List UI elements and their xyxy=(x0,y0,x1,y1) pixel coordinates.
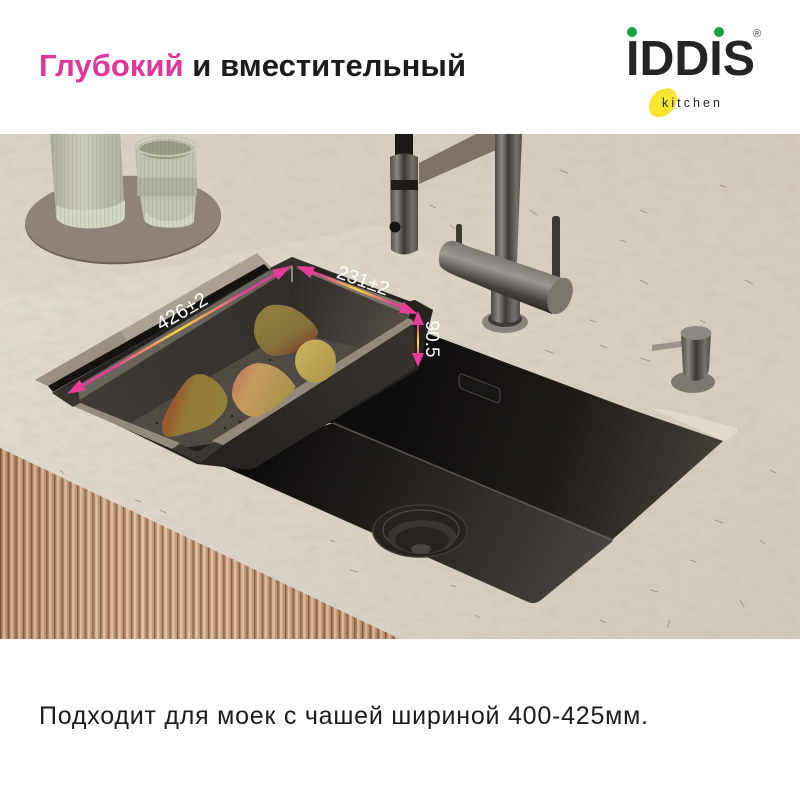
dispenser spout xyxy=(652,340,688,351)
stone countertop and wall xyxy=(0,134,800,639)
faucet pull-out hose xyxy=(395,134,413,156)
pear: middle xyxy=(232,363,295,417)
dispenser base xyxy=(671,371,715,393)
soap dispenser xyxy=(652,326,715,393)
dimension arrow: width 231 xyxy=(296,266,418,314)
fluted wood front panel xyxy=(0,448,400,639)
logo kitchen word: kitchen xyxy=(662,96,720,110)
dimension label: 231±2: 231±2 xyxy=(334,261,392,301)
faucet xyxy=(390,134,578,333)
basin back wall xyxy=(300,328,723,540)
colander centre seam xyxy=(291,266,293,282)
faucet base xyxy=(482,290,528,333)
colander perforated floor xyxy=(75,265,362,449)
dispenser top xyxy=(680,326,712,340)
logo wordmark: IDDIS xyxy=(626,32,755,86)
colander corner: bottom xyxy=(173,442,223,463)
logo registered mark: ® xyxy=(753,28,761,40)
main sink basin xyxy=(213,328,737,603)
drain strainer xyxy=(373,505,467,557)
pear: front left xyxy=(162,374,227,437)
dimension arrow: length 426 xyxy=(67,266,291,394)
title: Глубокий и вместительный xyxy=(39,48,466,83)
colander corner: top xyxy=(270,257,314,270)
pear: back xyxy=(254,305,318,356)
dimension label: 90.5: 90.5 xyxy=(421,321,442,357)
faucet pull-out head xyxy=(390,154,418,254)
faucet spout arm xyxy=(419,134,495,184)
footer note: Подходит для моек с чашей шириной 400-425мм. xyxy=(39,702,648,730)
colander insert xyxy=(52,257,433,470)
colander corner: left xyxy=(52,382,80,407)
bottle xyxy=(50,134,125,228)
logo green dots xyxy=(627,27,724,37)
dimension label: 426±2: 426±2 xyxy=(152,289,212,335)
dispenser body xyxy=(681,333,711,381)
basin crease highlight xyxy=(333,423,613,540)
colander right inner wall xyxy=(287,265,413,348)
dimension arrow: depth 90.5 xyxy=(412,311,424,367)
water glass xyxy=(135,136,197,228)
colander front outer wall xyxy=(254,324,415,468)
mat under glassware xyxy=(25,176,221,264)
logo yellow blob xyxy=(649,88,677,117)
basin lip xyxy=(650,408,737,441)
faucet column xyxy=(495,134,522,270)
photo: kitchen sink with colander xyxy=(0,134,800,639)
pear: small right xyxy=(295,340,336,382)
faucet levers xyxy=(456,216,560,282)
basin floor xyxy=(213,423,613,603)
colander rim xyxy=(60,264,414,449)
overflow slot xyxy=(459,374,500,403)
colander corner: right xyxy=(408,300,433,320)
colander cut-out in stone xyxy=(35,253,272,392)
faucet mixer body xyxy=(439,241,568,314)
logo: iddis kitchen xyxy=(626,27,761,117)
faucet body end cap xyxy=(547,278,573,314)
colander backing shell xyxy=(52,257,433,470)
